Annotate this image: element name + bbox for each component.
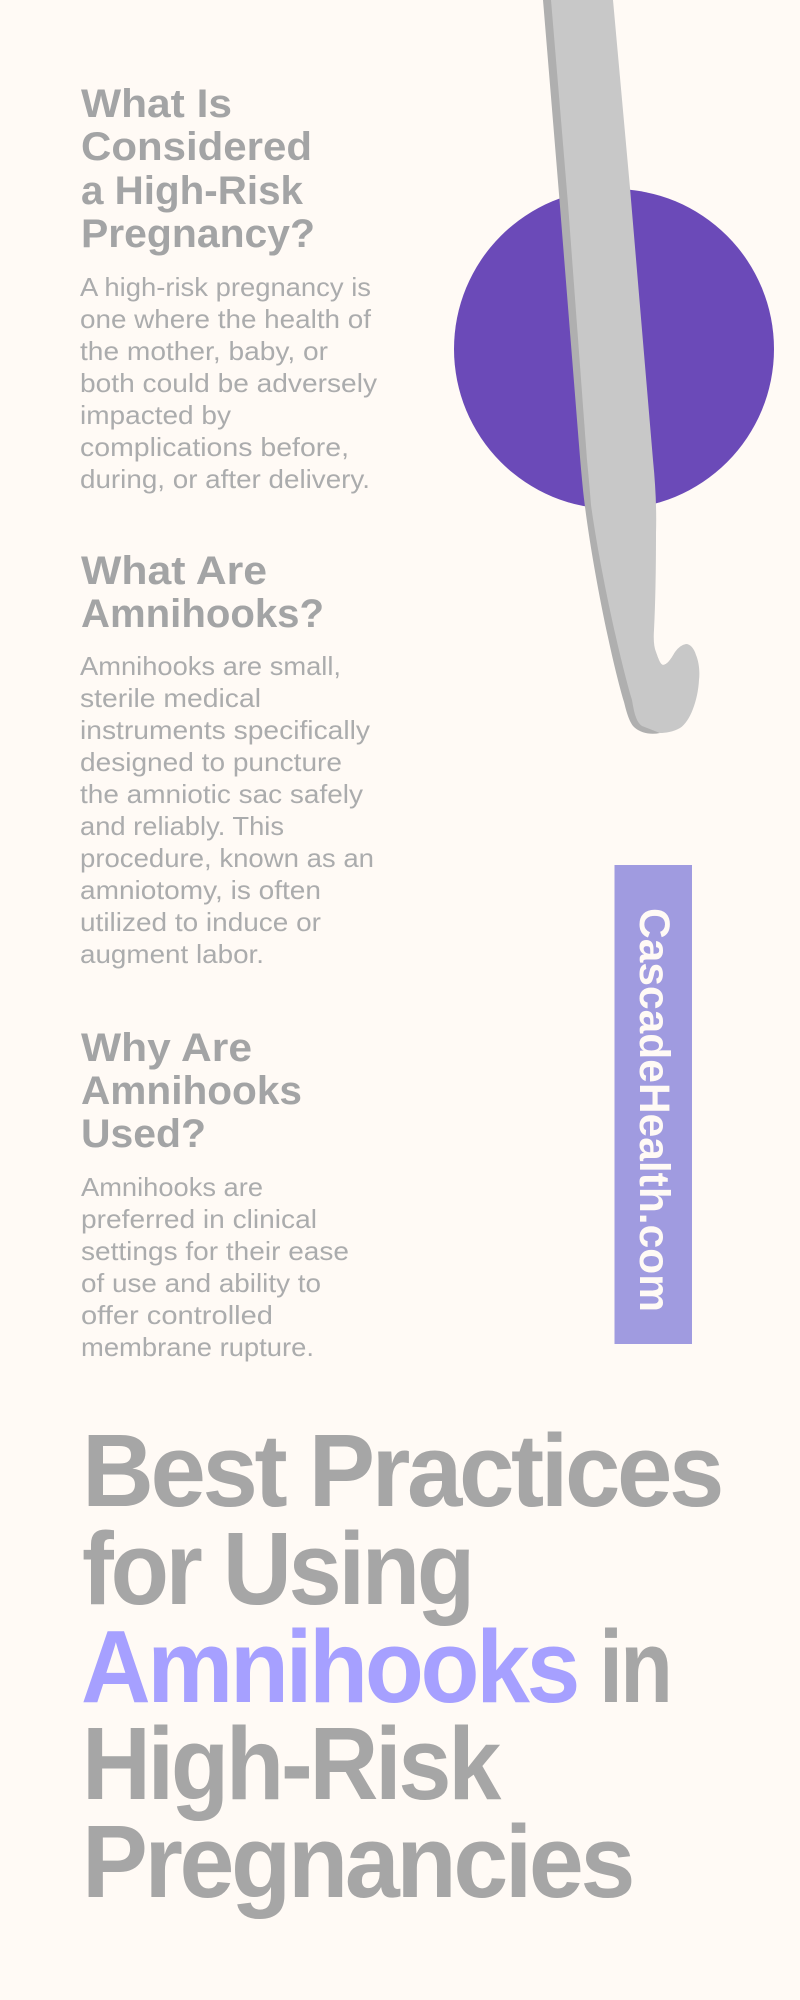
section text: high-risk pregnancy: the mother, baby, or xyxy=(80,336,328,366)
section heading: what are amnihooks: Amnihooks? xyxy=(81,592,324,636)
section text: why amnihooks are used xyxy=(81,1172,349,1362)
section heading: high-risk pregnancy: What Is xyxy=(81,82,232,126)
section text: what are amnihooks: instruments specifically xyxy=(80,715,370,745)
section text: what are amnihooks: sterile medical xyxy=(80,683,261,713)
section text: what are amnihooks: Amnihooks are small, xyxy=(80,651,341,681)
main title xyxy=(81,1413,721,1919)
main title: for Using xyxy=(82,1511,472,1626)
section text: high-risk pregnancy: both could be adversely xyxy=(80,368,377,398)
section heading: why amnihooks are used: Used? xyxy=(81,1112,206,1156)
section text: why amnihooks are used: preferred in clinical xyxy=(81,1204,317,1234)
main title: Best Practices xyxy=(82,1413,721,1528)
section text: high-risk pregnancy: one where the health of xyxy=(80,304,372,334)
section heading: high-risk pregnancy xyxy=(81,82,315,256)
website banner xyxy=(614,865,692,1344)
section text: high-risk pregnancy: complications before, xyxy=(80,432,349,462)
section text: why amnihooks are used: offer controlled xyxy=(81,1300,273,1330)
section heading: why amnihooks are used: Why Are xyxy=(81,1026,252,1070)
main title: in xyxy=(599,1609,670,1724)
section heading: high-risk pregnancy: a High-Risk xyxy=(81,169,304,213)
section heading: why amnihooks are used xyxy=(81,1026,302,1156)
illustration: purple circle with amnihook xyxy=(454,0,774,734)
section text: what are amnihooks: procedure, known as an xyxy=(80,843,374,873)
section heading: high-risk pregnancy: Pregnancy? xyxy=(81,212,315,256)
section text: high-risk pregnancy: A high-risk pregnancy is xyxy=(80,272,371,302)
section text: what are amnihooks: augment labor. xyxy=(80,939,264,969)
main title: Pregnancies xyxy=(82,1804,632,1919)
main title: High-Risk xyxy=(82,1706,502,1821)
section text: high-risk pregnancy: during, or after delivery. xyxy=(80,464,370,494)
section heading: what are amnihooks xyxy=(81,549,324,636)
main title: Amnihooks xyxy=(81,1609,577,1724)
section text: high-risk pregnancy: impacted by xyxy=(80,400,231,430)
section text: what are amnihooks: utilized to induce or xyxy=(80,907,321,937)
section text: why amnihooks are used: of use and ability to xyxy=(81,1268,321,1298)
section text: what are amnihooks: and reliably. This xyxy=(80,811,284,841)
section heading: high-risk pregnancy: Considered xyxy=(81,125,312,169)
section text: high-risk pregnancy xyxy=(80,272,377,494)
section text: what are amnihooks: designed to puncture xyxy=(80,747,342,777)
section text: what are amnihooks: the amniotic sac safely xyxy=(80,779,363,809)
section text: why amnihooks are used: membrane rupture. xyxy=(81,1332,314,1362)
section heading: what are amnihooks: What Are xyxy=(81,549,267,593)
amnihook instrument xyxy=(543,0,699,734)
section text: what are amnihooks: amniotomy, is often xyxy=(80,875,321,905)
website label: CascadeHealth.com xyxy=(630,908,678,1312)
section text: what are amnihooks xyxy=(80,651,374,969)
section heading: why amnihooks are used: Amnihooks xyxy=(81,1069,302,1113)
section text: why amnihooks are used: Amnihooks are xyxy=(81,1172,263,1202)
purple circle xyxy=(454,189,774,509)
section text: why amnihooks are used: settings for their ease xyxy=(81,1236,349,1266)
